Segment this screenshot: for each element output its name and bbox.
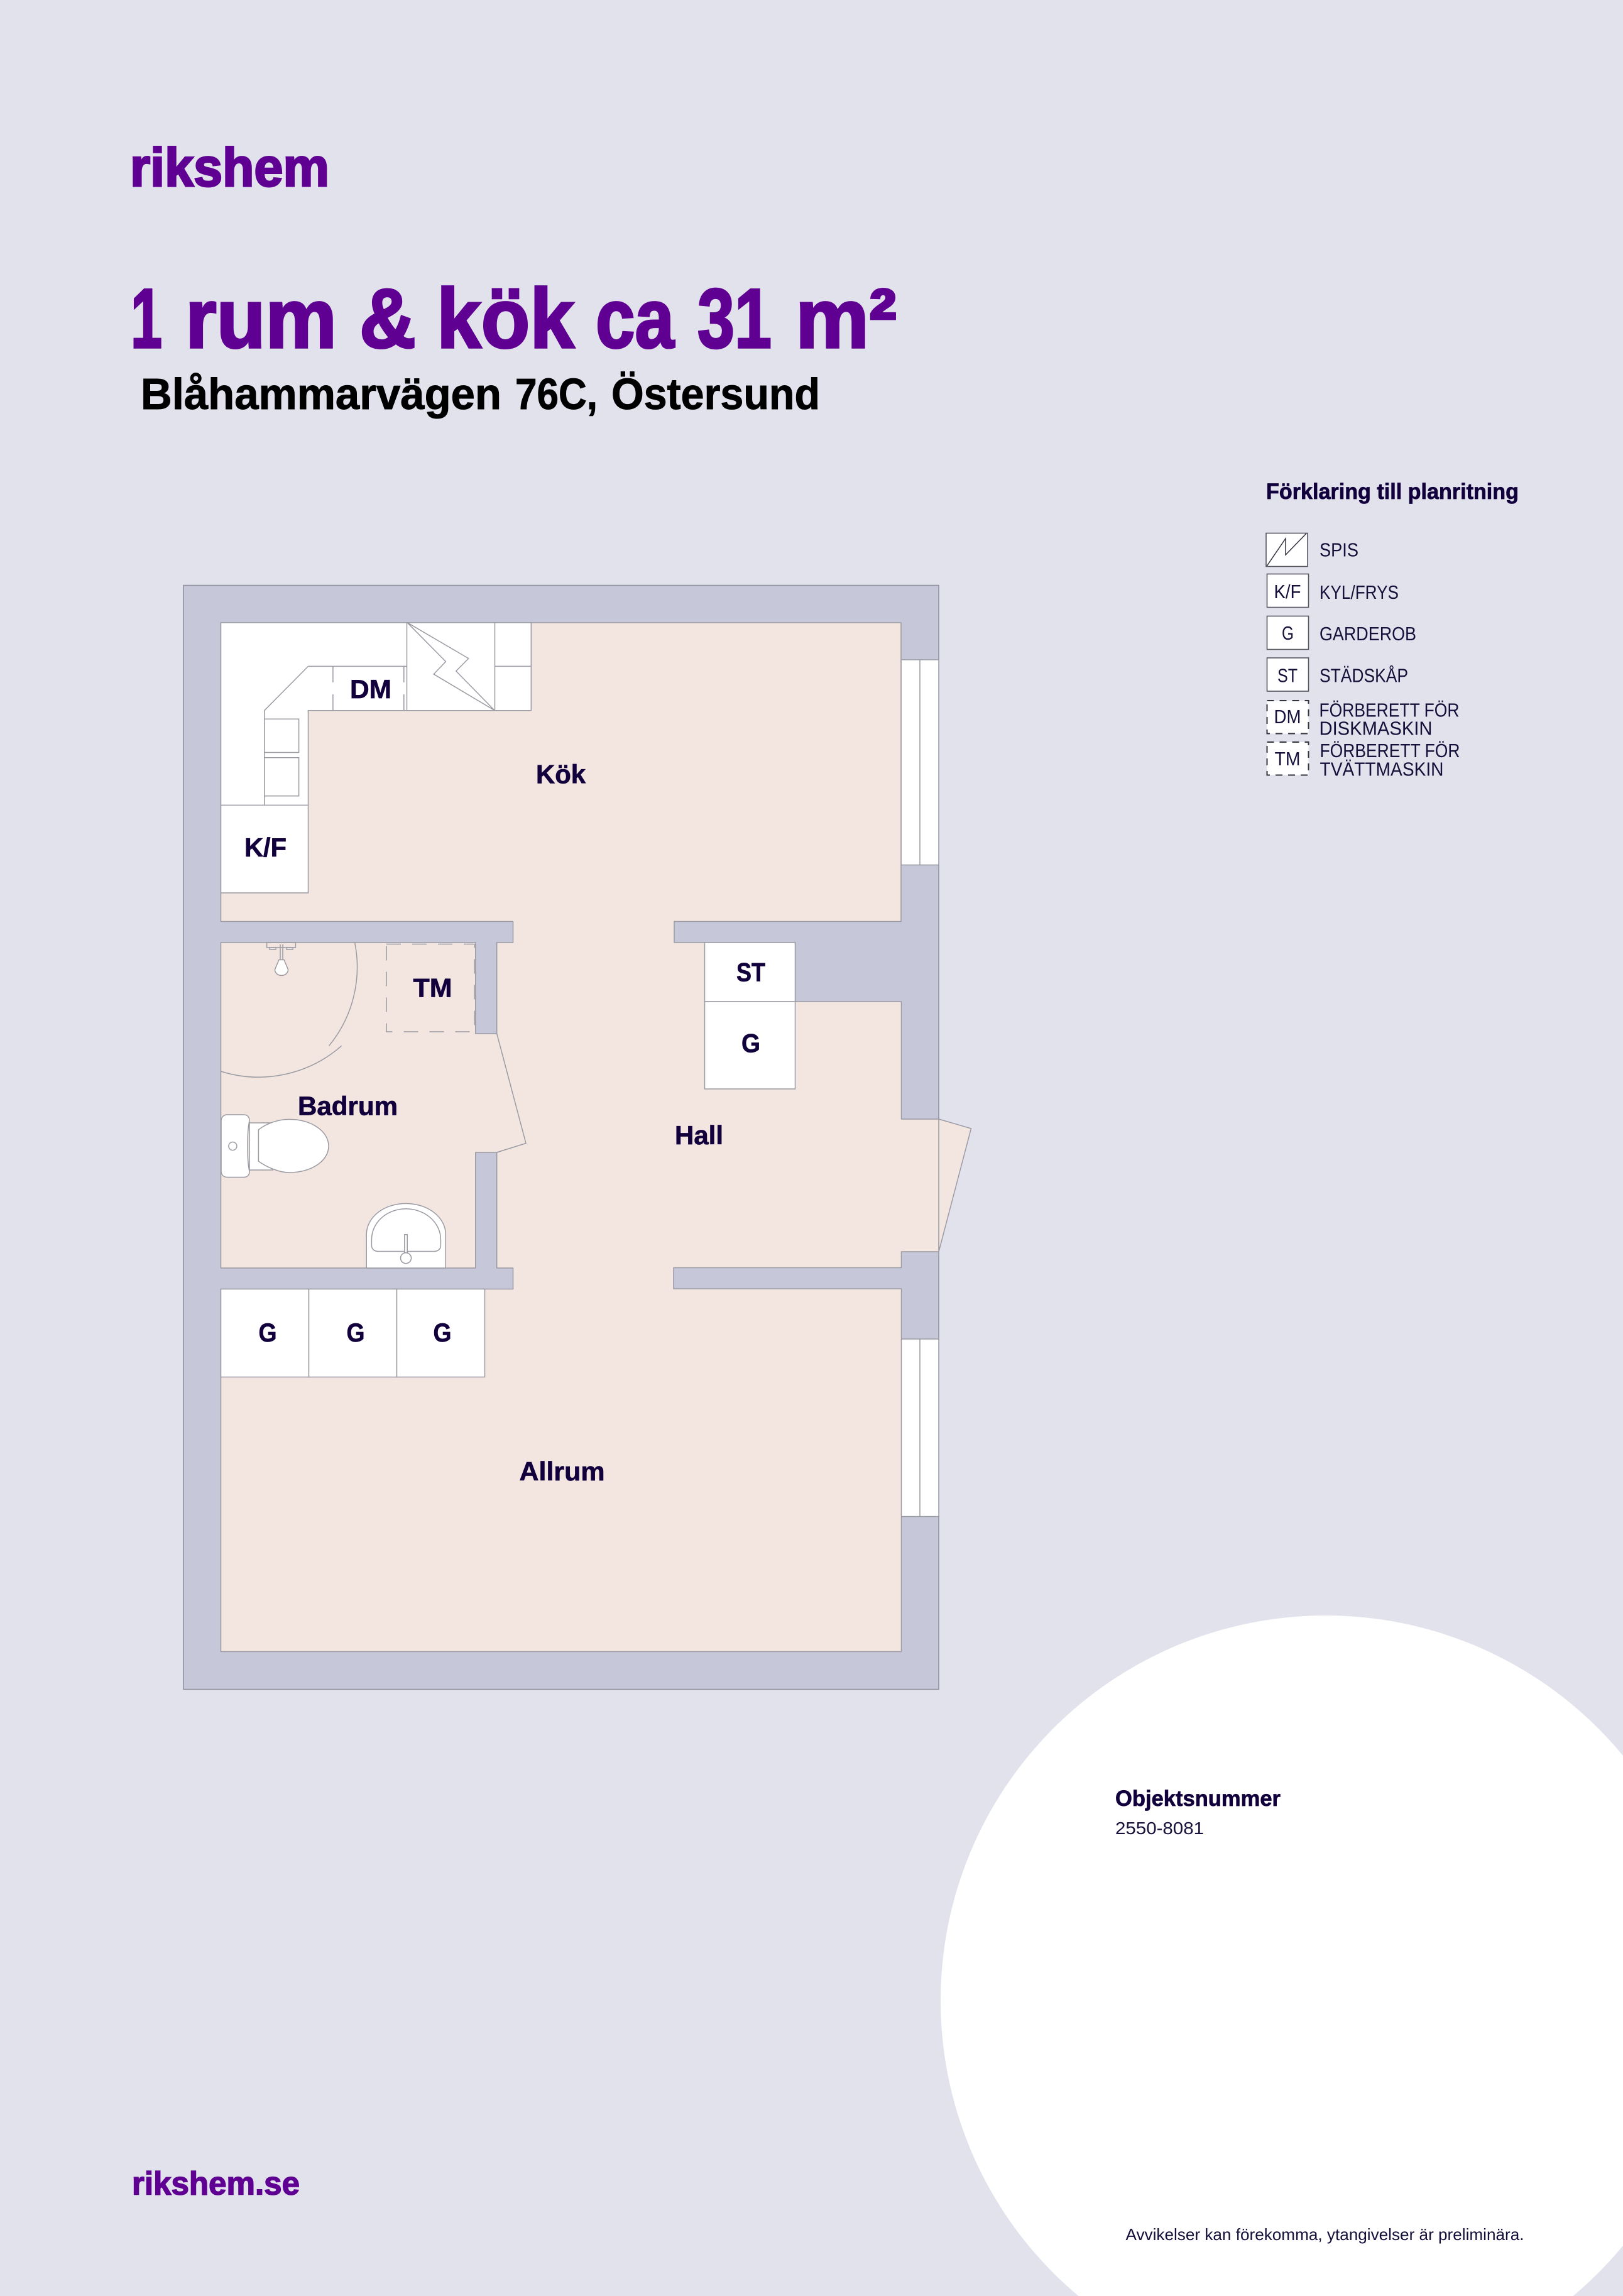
stove (407, 623, 531, 711)
address subtitle: Östersund (611, 369, 820, 418)
label: Hall: Hall (675, 1120, 723, 1150)
address subtitle: Blåhammarvägen (141, 369, 501, 418)
washing machine space (386, 944, 474, 1032)
wardrobe: G hall (705, 1002, 795, 1089)
title: 1 (131, 272, 162, 366)
disclaimer: Avvikelser kan förekomma, ytangivelser är preliminära. (1126, 2225, 1524, 2244)
window: kitchen (901, 660, 939, 865)
legend item: diskmaskin: DISKMASKIN (1320, 718, 1433, 739)
legend item: städskåp (1267, 658, 1408, 691)
wardrobes: G G G: G (434, 1318, 451, 1347)
wardrobes: G G G: G (347, 1318, 364, 1347)
legend panel (1266, 479, 1519, 780)
legend item: tvättmaskin: FÖRBERETT FÖR (1320, 740, 1460, 762)
title (131, 272, 897, 366)
title: 31 (697, 272, 772, 366)
label: Allrum: Allrum (519, 1457, 604, 1486)
label: Kök: Kök (536, 759, 586, 789)
label: Badrum: Badrum (298, 1091, 398, 1121)
legend item: garderob: G (1282, 622, 1294, 644)
washbasin (366, 1203, 445, 1268)
legend item: diskmaskin: FÖRBERETT FÖR (1320, 699, 1459, 721)
label: TM: TM (413, 973, 452, 1003)
cupboard: ST: ST (736, 958, 765, 987)
entrance door (939, 1119, 971, 1252)
label: K/F: K/F (244, 833, 287, 862)
toilet (221, 1115, 329, 1178)
legend item: spis: SPIS (1320, 539, 1358, 560)
legend heading: Förklaring till planritning (1266, 479, 1519, 504)
legend item: tvättmaskin (1267, 740, 1460, 780)
wardrobe: G hall: G (741, 1028, 760, 1058)
dishwasher slot (333, 666, 404, 711)
bathroom door (497, 1034, 526, 1152)
legend item: tvättmaskin: TVÄTTMASKIN (1320, 758, 1444, 780)
title: m² (795, 272, 897, 366)
legend item: diskmaskin (1267, 699, 1459, 739)
label: DM: DM (350, 674, 391, 704)
legend item: garderob (1267, 616, 1416, 650)
object number: 2550-8081 (1115, 1818, 1204, 1838)
title: & (359, 272, 416, 366)
shower curtain arcs (221, 943, 358, 1077)
kitchen counter (221, 623, 531, 893)
outer walls (183, 586, 939, 1689)
object number: Objektsnummer (1115, 1786, 1281, 1811)
window: living room (901, 1339, 939, 1517)
legend item: diskmaskin: DM (1274, 706, 1301, 728)
legend item: spis (1266, 533, 1358, 567)
title: rum (185, 272, 337, 366)
room floor: kök, hall, allrum, badrum (221, 623, 939, 1651)
website link: rikshem.se (132, 2165, 300, 2202)
legend item: garderob: GARDEROB (1320, 623, 1416, 645)
title: kök (437, 272, 574, 366)
legend item: kyl/frys (1267, 574, 1399, 607)
cupboard: ST (705, 943, 795, 1002)
sink (265, 719, 299, 796)
legend item: städskåp: ST (1277, 665, 1298, 686)
legend item: tvättmaskin: TM (1274, 748, 1301, 770)
title: ca (596, 272, 675, 366)
address subtitle: 76C, (515, 369, 598, 418)
shower fixture (267, 943, 295, 975)
legend item: kyl/frys: K/F (1274, 581, 1301, 603)
logo: rikshem: rikshem (130, 138, 329, 198)
wardrobes: G G G (221, 1289, 485, 1377)
object number (1115, 1786, 1281, 1838)
floor plan (183, 586, 971, 1689)
legend item: kyl/frys: KYL/FRYS (1320, 581, 1399, 603)
address subtitle (141, 369, 820, 418)
wardrobes: G G G: G (259, 1318, 276, 1347)
white circle panel (941, 1615, 1623, 2296)
legend item: städskåp: STÄDSKÅP (1320, 665, 1408, 686)
